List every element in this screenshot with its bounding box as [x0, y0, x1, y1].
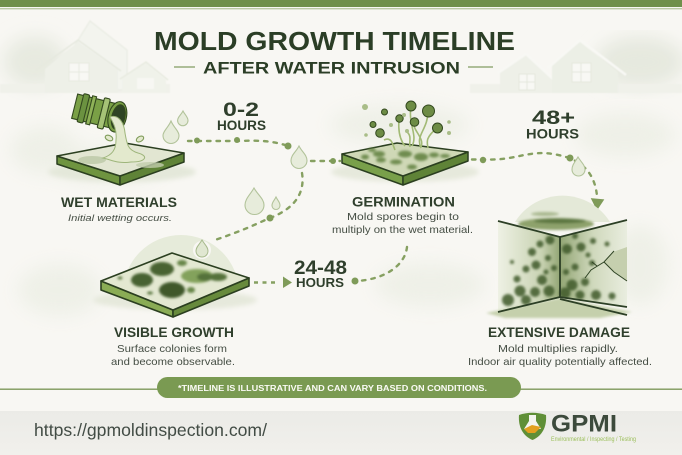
- tile shadow: [48, 162, 196, 182]
- time label: 0-2 hours: [217, 99, 266, 133]
- time label: 24-48 hours: [294, 258, 347, 290]
- timeline path: 0-2 hours to germination: [188, 137, 340, 241]
- icon: shield: [519, 413, 546, 440]
- logo wordmark: GPMI: [551, 410, 617, 438]
- description: Initial wetting occurs.: [68, 213, 172, 224]
- tile shadow: [93, 290, 257, 310]
- description: Mold spores begin to: [347, 211, 459, 223]
- background houses left: [0, 21, 170, 93]
- water pour: [103, 116, 145, 163]
- description: multiply on the wet material.: [332, 224, 473, 236]
- bare plaster crack: [604, 247, 627, 281]
- droplet on tile: [193, 241, 211, 259]
- moldy tile: [101, 253, 249, 317]
- time label: 0-2 hours: 0-2: [223, 99, 259, 121]
- timeline path: 24-48 hours upward: [352, 247, 407, 284]
- icon: pipe: [71, 91, 130, 134]
- halo: [515, 196, 610, 222]
- timeline path: germination to extensive damage: [472, 153, 603, 209]
- icon: spore stalks: [384, 106, 437, 150]
- logo tagline: Environmental / Inspecting / Testing: [551, 436, 636, 443]
- heading: GERMINATION: [352, 194, 455, 210]
- icon: spores: [370, 101, 442, 137]
- time label: 0-2 hours: HOURS: [217, 118, 266, 133]
- time label: 48+ hours: 48+: [532, 107, 575, 129]
- room walls: [498, 222, 560, 312]
- heading: WET MATERIALS: [61, 194, 177, 210]
- panel: germination: [331, 101, 479, 236]
- title: MOLD GROWTH TIMELINE: [154, 28, 515, 56]
- wet tile: [57, 143, 184, 185]
- droplets: [163, 111, 585, 214]
- mold spots: [361, 148, 450, 170]
- footer band: [0, 411, 682, 455]
- panel: extensive damage: [468, 196, 652, 368]
- logo: GPMI: [519, 410, 636, 443]
- description: Surface colonies form: [117, 343, 227, 355]
- time label: 24-48 hours: 24-48: [294, 258, 347, 279]
- time label: 48+ hours: HOURS: [526, 126, 579, 142]
- timeline path: visible growth arrow: [254, 276, 292, 288]
- description: and become observable.: [111, 356, 235, 368]
- room edges: [498, 220, 627, 315]
- time label: 24-48 hours: HOURS: [296, 275, 344, 290]
- mold blotches: [502, 233, 616, 306]
- subtitle: AFTER WATER INTRUSION: [203, 58, 460, 78]
- halo: [128, 235, 235, 272]
- panel: wet materials: [48, 91, 196, 224]
- floor: [486, 298, 632, 318]
- disclaimer banner: [0, 377, 682, 398]
- heading: EXTENSIVE DAMAGE: [488, 324, 630, 340]
- description: [468, 343, 652, 368]
- mold tile: [342, 143, 468, 185]
- tile shadow: [331, 162, 479, 182]
- website url: https://gpmoldinspection.com/: [34, 420, 267, 440]
- description: Indoor air quality potentially affected.: [468, 356, 652, 368]
- splash drops: [104, 134, 145, 143]
- description: Mold multiplies rapidly.: [498, 343, 618, 355]
- top banner: [0, 0, 682, 9]
- time label: 48+ hours: [526, 107, 579, 142]
- colonies: [118, 260, 227, 298]
- description: [332, 211, 473, 236]
- background stains: [10, 105, 675, 316]
- description: [111, 343, 235, 368]
- panel: visible growth: [93, 235, 257, 368]
- ceiling stains: [518, 212, 594, 230]
- heading: VISIBLE GROWTH: [114, 324, 234, 340]
- disclaimer banner: *TIMELINE IS ILLUSTRATIVE AND CAN VARY BASED ON CONDITIONS.: [178, 384, 487, 393]
- background houses right: [470, 36, 682, 93]
